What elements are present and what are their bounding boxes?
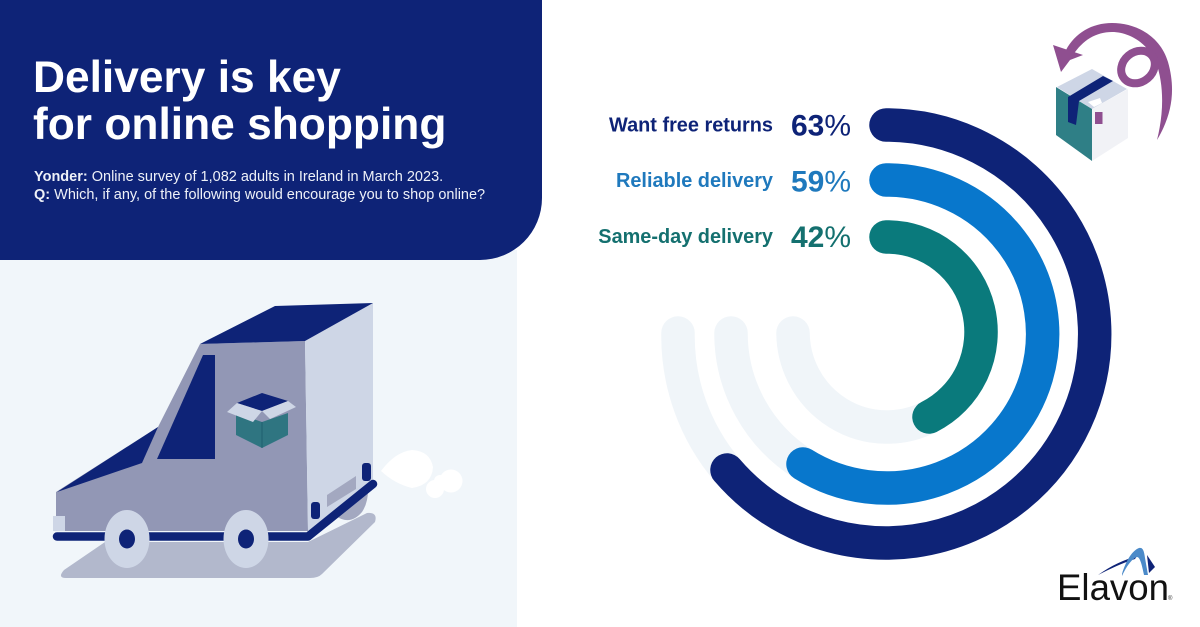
label: want free returns: [609, 110, 851, 142]
value: 59%: 59%: [791, 166, 851, 198]
chart: radial delivery bars: [678, 125, 1095, 543]
rear wheel: [336, 490, 368, 520]
track: free returns: [678, 333, 727, 470]
window: [157, 355, 215, 459]
bar: reliable delivery 59%: [803, 180, 1043, 488]
title line 2: for online shopping: [33, 100, 446, 149]
value: 63%: 63%: [791, 110, 851, 142]
value: 42%: 42%: [791, 221, 851, 254]
back wheel: [224, 510, 268, 568]
label: reliable delivery: [616, 166, 851, 198]
logo: Elavon: [1057, 548, 1173, 608]
logo: Elavon: Elavon: [1057, 567, 1169, 608]
bar: free returns 63%: [727, 125, 1095, 543]
panel: header: [0, 0, 542, 260]
panel: van background: [0, 250, 517, 627]
van roof: [200, 303, 373, 344]
icon: return parcel: [1053, 23, 1172, 161]
bar: same-day delivery 42%: [886, 237, 981, 417]
label: same-day delivery: Same-day delivery: [598, 226, 773, 248]
label: reliable delivery: Reliable delivery: [616, 170, 773, 192]
survey question: Q: Which, if any, of the following would encourage you to shop online?: [34, 187, 485, 203]
label: same-day delivery: [598, 221, 851, 254]
title: Delivery is key: [33, 53, 341, 102]
van side: [56, 341, 308, 531]
van rear: [305, 303, 373, 531]
front wheel: [104, 510, 150, 568]
illustration: delivery van: [53, 303, 462, 578]
icon: return arrow: [1053, 23, 1172, 140]
track: same-day delivery: [793, 333, 929, 427]
registered mark: ®: [1168, 595, 1173, 602]
track: reliable delivery: [731, 333, 803, 464]
rear lights: [311, 502, 320, 519]
bumper: [57, 484, 373, 536]
headlight: [53, 516, 65, 531]
van shadow: [61, 513, 376, 578]
logo swoosh: [1098, 548, 1155, 576]
icon: open parcel: [227, 393, 296, 448]
label: want free returns: Want free returns: [609, 114, 773, 136]
exhaust cloud: [381, 450, 462, 498]
hood: [57, 427, 158, 492]
survey source: Yonder: Online survey of 1,082 adults in Ireland in March 2023.: [34, 169, 443, 185]
number plate: [327, 476, 356, 507]
